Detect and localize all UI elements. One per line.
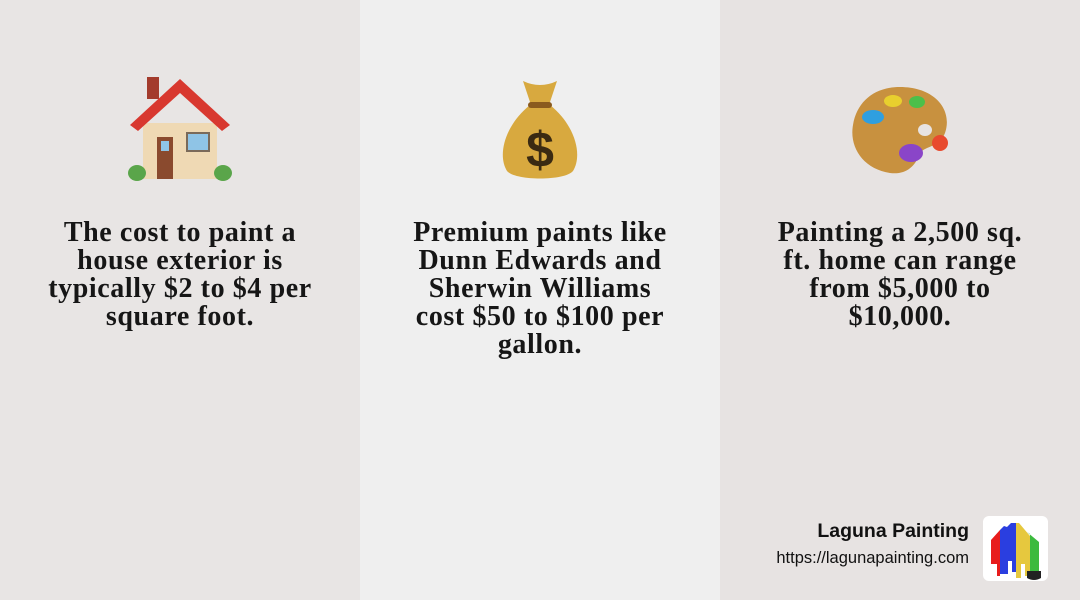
icon: money bag bbox=[502, 81, 578, 178]
text: premium paints: cost $50 to $100 per bbox=[416, 301, 664, 332]
text: total range bbox=[778, 217, 1022, 332]
text: exterior cost: typically $2 to $4 per bbox=[48, 273, 312, 304]
icon: house bbox=[128, 77, 232, 181]
text: premium paints: Sherwin Williams bbox=[429, 273, 651, 304]
brand: name and url: https://lagunapainting.com bbox=[776, 549, 969, 567]
text: exterior cost: house exterior is bbox=[77, 245, 283, 276]
brand: name and url: Laguna Painting bbox=[817, 520, 969, 542]
text: premium paints: Dunn Edwards and bbox=[418, 245, 662, 276]
text: premium paints: Premium paints like bbox=[413, 217, 667, 248]
icon: palette bbox=[852, 87, 948, 174]
logo bbox=[983, 516, 1048, 581]
text: total range: $10,000. bbox=[849, 301, 951, 332]
text: premium paints bbox=[413, 217, 667, 360]
text: exterior cost: The cost to paint a bbox=[64, 217, 296, 248]
brand: name and url bbox=[776, 520, 969, 567]
text: total range: from $5,000 to bbox=[809, 273, 991, 304]
text: exterior cost: square foot. bbox=[106, 301, 254, 332]
text: total range: ft. home can range bbox=[783, 245, 1017, 276]
panel: total range bbox=[720, 0, 1080, 600]
panel: premium paints bbox=[360, 0, 720, 600]
text: premium paints: gallon. bbox=[498, 329, 582, 360]
text: total range: Painting a 2,500 sq. bbox=[778, 217, 1022, 248]
icon: money bag: $ bbox=[526, 122, 554, 178]
panel: exterior cost bbox=[0, 0, 360, 600]
text: exterior cost bbox=[48, 217, 312, 332]
